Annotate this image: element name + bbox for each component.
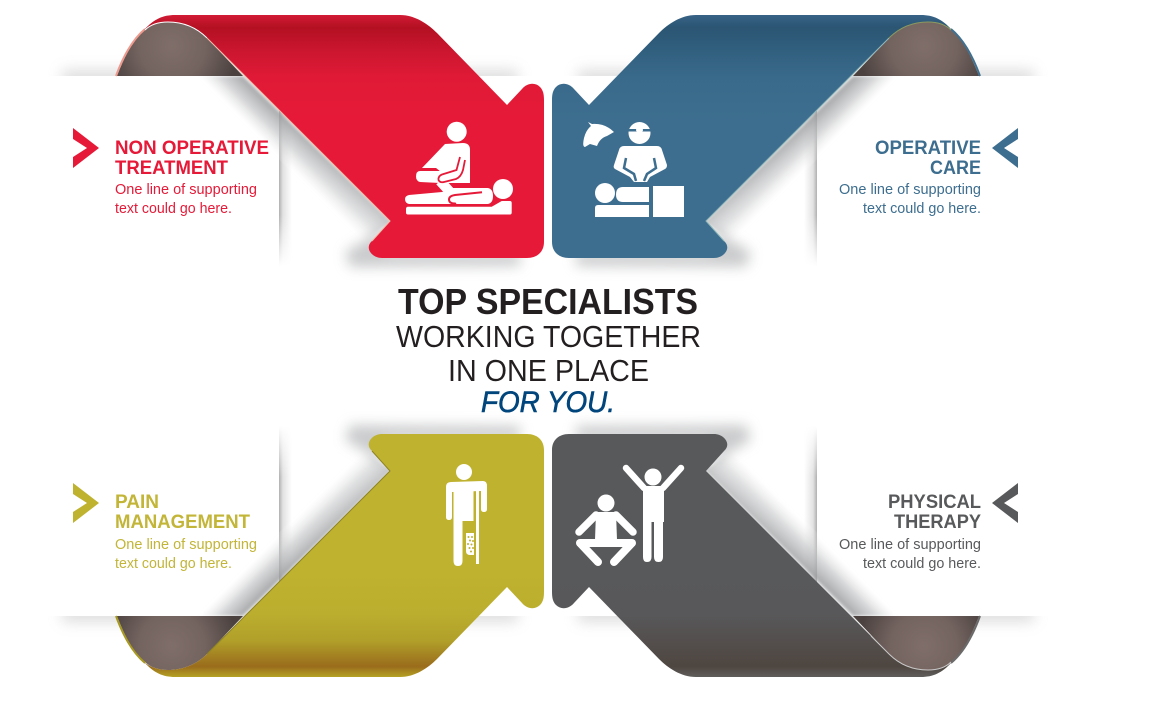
text: supporting copy: One line of supporting: [115, 181, 257, 198]
heading: non operative treatment: TREATMENT: [115, 158, 228, 179]
panel: non operative treatment: [50, 15, 544, 267]
icon: arrow pointer: [992, 128, 1018, 168]
ribbon arrow: dark grey: [552, 425, 1046, 677]
heading: pain management: [115, 492, 250, 533]
icon: surgeon with lamp and patient: [583, 122, 684, 217]
heading: pain management: PAIN: [115, 492, 159, 513]
panel: pain management: [50, 425, 544, 677]
heading: physical therapy: PHYSICAL: [888, 492, 981, 513]
text: supporting copy: text could go here.: [115, 555, 232, 572]
heading: operative care: CARE: [930, 158, 981, 179]
text: supporting copy: [115, 181, 257, 217]
heading: operative care: OPERATIVE: [875, 138, 981, 159]
title: WORKING TOGETHER: [396, 319, 701, 354]
panel: operative care: [552, 15, 1046, 267]
ribbon arrow: blue: [552, 15, 1046, 267]
panel: physical therapy: [552, 425, 1046, 677]
title: [396, 281, 701, 419]
heading: non operative treatment: [115, 138, 269, 179]
heading: pain management: MANAGEMENT: [115, 512, 250, 533]
text: supporting copy: One line of supporting: [115, 536, 257, 553]
text: supporting copy: [839, 181, 981, 217]
text: supporting copy: [115, 536, 257, 572]
icon: arrow pointer: [73, 128, 99, 168]
icon: massage therapist with patient: [405, 122, 513, 214]
title: TOP SPECIALISTS: [398, 281, 698, 322]
icon: arrow pointer: [73, 483, 99, 523]
icon: exercising figures: [579, 468, 681, 562]
title: IN ONE PLACE: [448, 353, 649, 388]
heading: physical therapy: [888, 492, 981, 533]
ribbon arrow: red: [50, 15, 544, 267]
text: supporting copy: text could go here.: [863, 200, 981, 217]
title: FOR YOU.: [481, 386, 615, 419]
ribbon arrow: gold: [50, 425, 544, 677]
heading: operative care: [875, 138, 981, 179]
text: supporting copy: One line of supporting: [839, 536, 981, 553]
icon: person with leg cast and crutch: [446, 464, 487, 566]
heading: physical therapy: THERAPY: [894, 512, 981, 533]
text: supporting copy: [839, 536, 981, 572]
text: supporting copy: text could go here.: [863, 555, 981, 572]
text: supporting copy: text could go here.: [115, 200, 232, 217]
heading: non operative treatment: NON OPERATIVE: [115, 138, 269, 159]
text: supporting copy: One line of supporting: [839, 181, 981, 198]
icon: arrow pointer: [992, 483, 1018, 523]
